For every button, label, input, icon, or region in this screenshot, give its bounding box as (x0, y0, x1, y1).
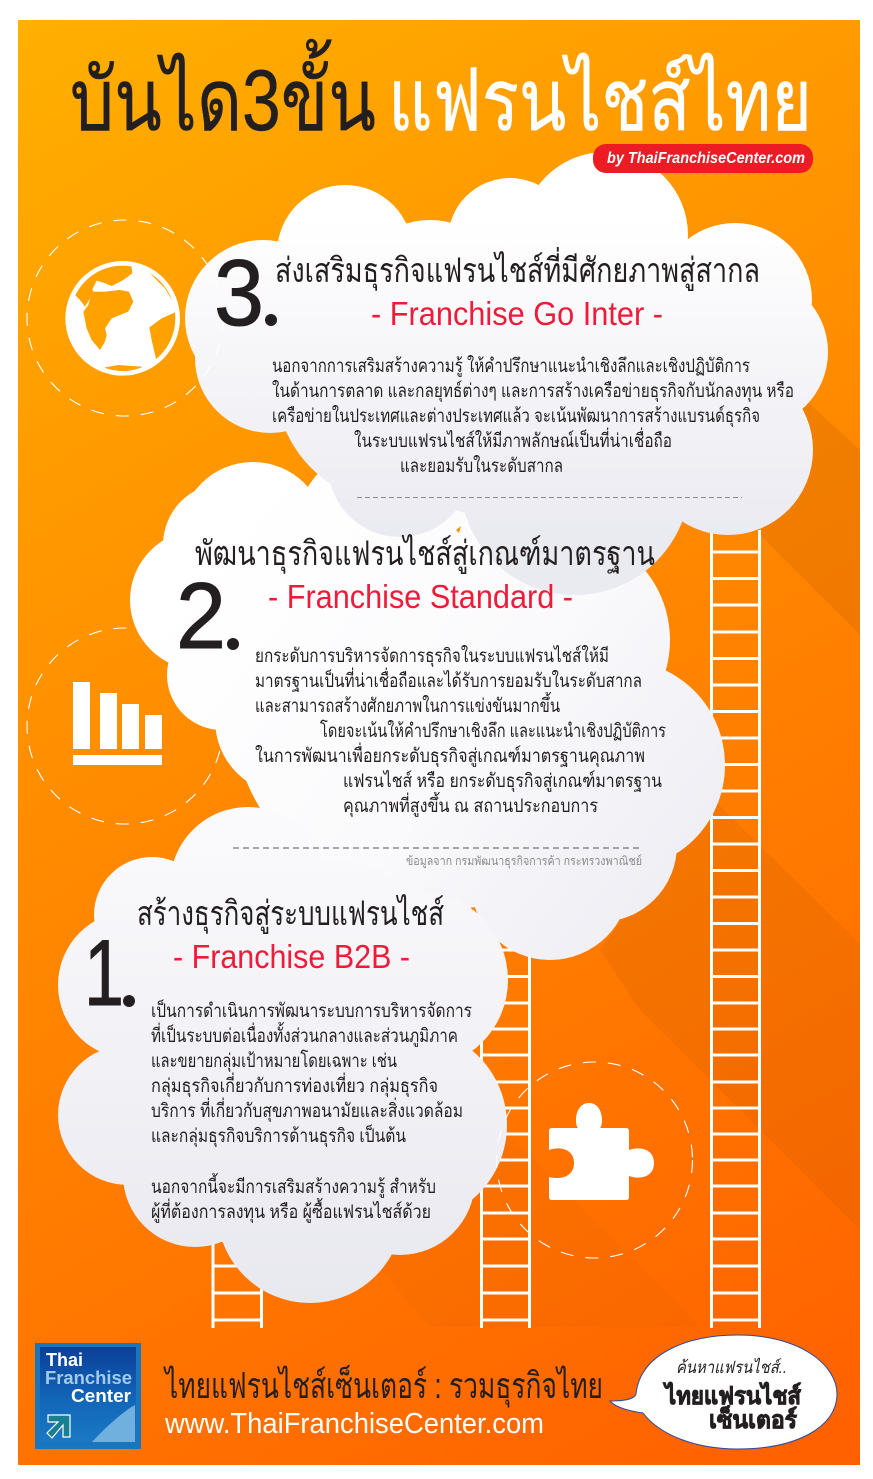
title (70, 39, 812, 149)
section 3 text: ส่งเสริมธุรกิจแฟรนไชส์ที่มีศักยภาพสู่สากล (275, 247, 760, 291)
section 1 text: ผู้ที่ต้องการลงทุน หรือ ผู้ซื้อแฟรนไชส์ด้วย (151, 1198, 431, 1224)
dashed ring: chart (27, 628, 223, 824)
section 2 text: ในการพัฒนาเพื่อยกระดับธุรกิจสู่เกณฑ์มาตรฐานคุณภาพ (255, 742, 645, 768)
footer heading and url: ไทยแฟรนไชส์เซ็นเตอร์ : รวมธุรกิจไทย (163, 1363, 603, 1408)
dashed ring: puzzle (496, 1062, 692, 1258)
section 1 text: 1 (84, 920, 124, 1025)
speech bubble (610, 1335, 837, 1449)
ladder: middle (481, 905, 530, 1328)
byline pill: by ThaiFranchiseCenter.com (607, 150, 805, 167)
dashed ring: globe (27, 220, 223, 416)
section 2 text: ยกระดับการบริหารจัดการธุรกิจในระบบแฟรนไชส์ให้มี (255, 645, 609, 668)
cloud 2 (130, 446, 725, 960)
cloud 3 (185, 152, 828, 595)
icon: globe (65, 260, 180, 377)
section 1 text (84, 894, 472, 1224)
speech bubble: เซ็นเตอร์ (709, 1405, 797, 1434)
section 1 text: บริการ ที่เกี่ยวกับสุขภาพอนามัยและสิ่งแวดล้อม (151, 1097, 463, 1123)
section 2 text: และสามารถสร้างศักยภาพในการแข่งขันมากขึ้น (255, 692, 560, 717)
logo: Thai Franchise Center: Thai (46, 1350, 83, 1370)
section 3 text: และยอมรับในระดับสากล (400, 455, 563, 477)
icon: bar chart (73, 682, 162, 765)
title: บันได3ขั้น (70, 39, 376, 149)
section 3 text: - Franchise Go Inter - (371, 295, 663, 332)
logo: Thai Franchise Center: Center (71, 1386, 131, 1406)
section 2 text: คุณภาพที่สูงขึ้น ณ สถานประกอบการ (343, 792, 598, 818)
section 1 text: สร้างธุรกิจสู่ระบบแฟรนไชส์ (137, 894, 444, 934)
section 2 text: มาตรฐานเป็นที่น่าเชื่อถือและได้รับการยอมรับในระดับสากล (255, 667, 642, 692)
section 1 text: กลุ่มธุรกิจเกี่ยวกับการท่องเที่ยว กลุ่มธุรกิจ (151, 1072, 438, 1098)
section 2 text: ข้อมูลจาก กรมพัฒนาธุรกิจการค้า กระทรวงพาณิชย์ (406, 854, 642, 869)
section 3 text: 3 (214, 240, 264, 345)
section 2 text: - Franchise Standard - (268, 578, 573, 615)
section 1 text: นอกจากนี้จะมีการเสริมสร้างความรู้ สำหรับ (151, 1173, 436, 1198)
section 1 text: เป็นการดำเนินการพัฒนาระบบการบริหารจัดการ (151, 998, 472, 1022)
section 1 text: - Franchise B2B - (173, 938, 410, 975)
long diagonal cloud shadows (380, 395, 860, 1327)
section 3 text (214, 240, 794, 498)
section 3 text: เครือข่ายในประเทศและต่างประเทศแล้ว จะเน้นพัฒนาการสร้างแบรนด์ธุรกิจ (272, 405, 760, 428)
footer heading and url (163, 1363, 603, 1440)
icon: puzzle piece (549, 1103, 654, 1200)
section 1 text: ที่เป็นระบบต่อเนื่องทั้งส่วนกลางและส่วนภูมิภาค (151, 1022, 458, 1047)
ladder: left (213, 1240, 262, 1328)
speech bubble: ค้นหาแฟรนไชส์.. (676, 1357, 787, 1377)
section 3 text: นอกจากการเสริมสร้างความรู้ ให้คำปรึกษาแนะนำเชิงลึกและเชิงปฏิบัติการ (272, 355, 750, 377)
logo: Thai Franchise Center (35, 1343, 141, 1449)
logo: Thai Franchise Center: Franchise (45, 1368, 132, 1388)
section 1 text: และขยายกลุ่มเป้าหมายโดยเฉพาะ เช่น (151, 1049, 397, 1073)
section 2 text: โดยจะเน้นให้คำปรึกษาเชิงลึก และแนะนำเชิงปฏิบัติการ (320, 719, 666, 742)
orange speck between clouds (456, 526, 461, 533)
cloud 1 (58, 807, 508, 1303)
section 1 text: และกลุ่มธุรกิจบริการด้านธุรกิจ เป็นต้น (151, 1123, 406, 1148)
section 3 text: ในระบบแฟรนไชส์ให้มีภาพลักษณ์เป็นที่น่าเชื่อถือ (354, 427, 672, 452)
byline pill (593, 144, 813, 173)
ladder: right (711, 530, 760, 1328)
footer heading and url: www.ThaiFranchiseCenter.com (164, 1408, 544, 1440)
section 2 text: แฟรนไชส์ หรือ ยกระดับธุรกิจสู่เกณฑ์มาตรฐาน (343, 770, 662, 793)
section 2 text: 2 (176, 563, 226, 668)
speech bubble: ไทยแฟรนไชส์ (662, 1381, 801, 1410)
section 2 text: พัฒนาธุรกิจแฟรนไชส์สู่เกณฑ์มาตรฐาน (195, 534, 655, 574)
section 2 text (176, 534, 666, 869)
